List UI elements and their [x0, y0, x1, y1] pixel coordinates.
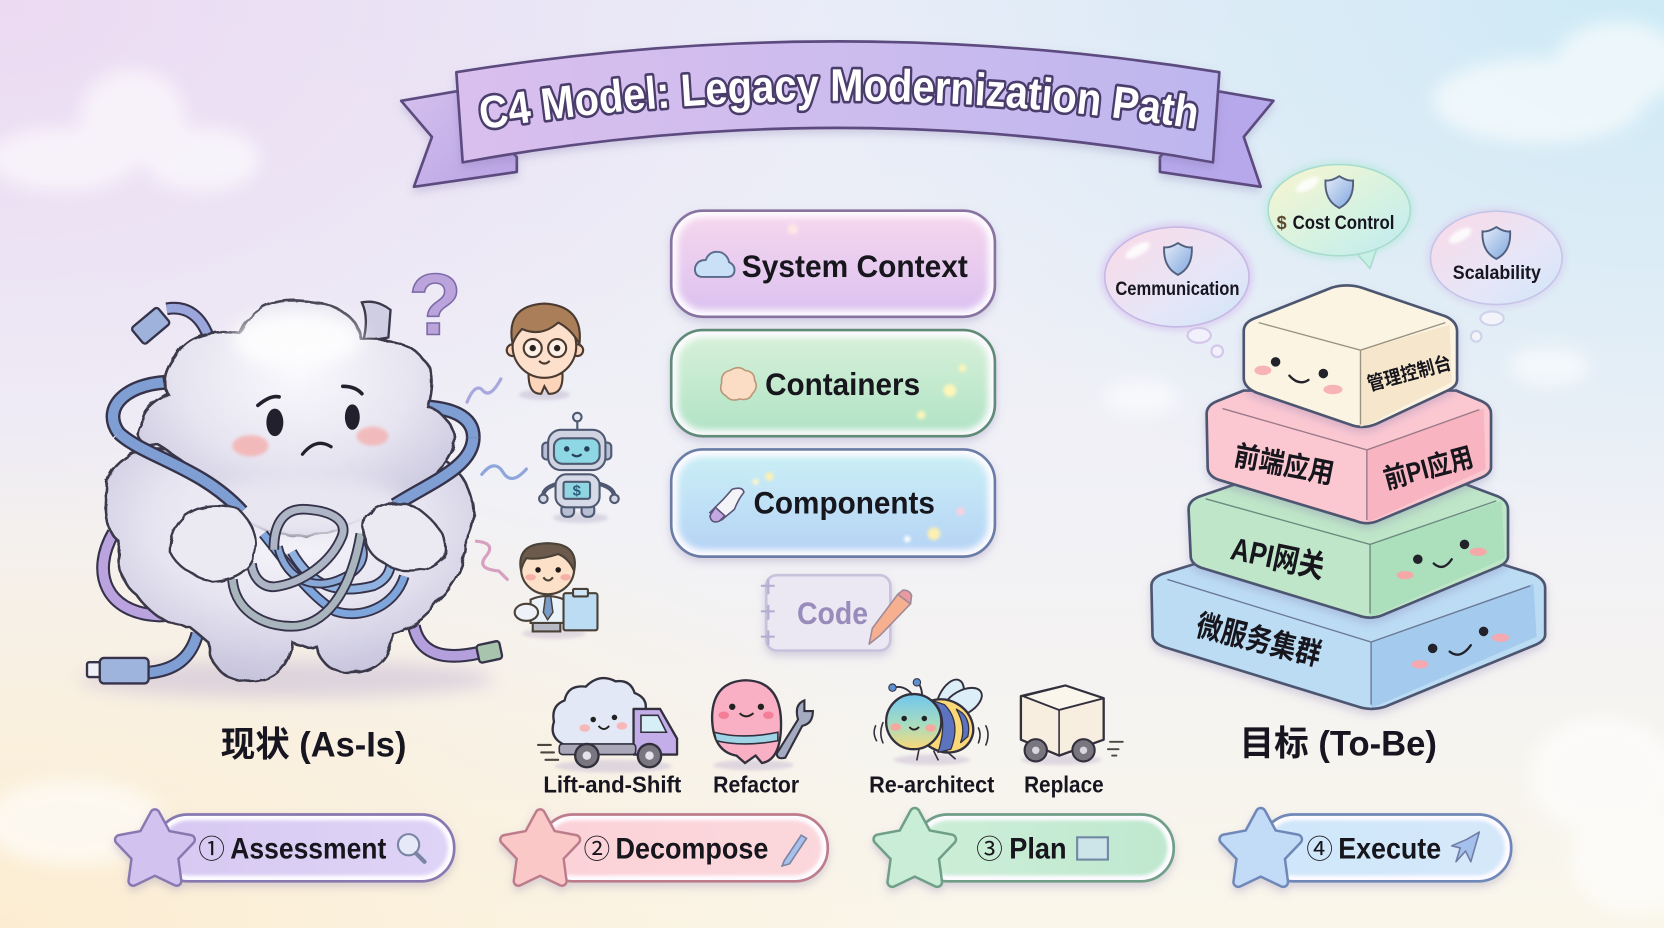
stakeholder squiggles — [467, 379, 526, 579]
ground shadow — [80, 660, 493, 698]
concern bubbles — [1100, 160, 1566, 357]
migration strategies — [538, 675, 1123, 798]
title: C4 Model: Legacy Modernization Path — [478, 66, 1199, 132]
icon: rocket — [1452, 832, 1479, 862]
label: Refactor — [713, 772, 799, 798]
strategy: refactor creature — [712, 680, 813, 798]
icon: magnifier — [398, 834, 424, 862]
step pills — [120, 813, 1511, 882]
icon: pencil — [869, 590, 912, 644]
step 4: execute: Execute — [1338, 833, 1441, 866]
bubble: communication: Cemmunication — [1115, 279, 1240, 300]
fluffy lower body — [106, 450, 473, 681]
strategy: lift-and-shift truck — [538, 678, 682, 798]
bubble: scalability: Scalability — [1453, 263, 1541, 284]
step 2: decompose: ② — [584, 835, 610, 865]
cables behind body — [103, 308, 480, 673]
bubble: cost control — [1264, 160, 1415, 268]
C4 levels — [671, 211, 995, 651]
step 2: decompose: Decompose — [616, 833, 768, 866]
tangled cables — [119, 433, 473, 626]
card: containers — [671, 330, 995, 436]
fluffy head — [139, 300, 455, 536]
stakeholders — [467, 304, 619, 639]
icon: container blob — [721, 368, 756, 400]
step 4: execute — [1224, 813, 1511, 882]
face — [1254, 357, 1342, 394]
label: Replace — [1024, 772, 1104, 798]
icon: plan box — [1077, 837, 1108, 860]
label: as-is: 现状 (As-Is) — [221, 726, 406, 765]
step 1: assessment: Assessment — [230, 833, 386, 866]
ribbon left tail — [401, 91, 517, 187]
block: microservices — [1151, 559, 1545, 709]
step 1: assessment: ① — [198, 835, 225, 865]
sad face — [232, 386, 388, 456]
legacy cloud character — [80, 256, 503, 698]
label: to-be: 目标 (To-Be) — [1240, 725, 1437, 764]
step 1: assessment — [120, 814, 454, 881]
developer with glasses — [507, 304, 583, 400]
question mark: ? — [409, 256, 462, 353]
ribbon right tail — [1160, 91, 1273, 187]
label: Re-architect — [869, 772, 995, 798]
step 2: decompose — [505, 814, 828, 881]
card: system context — [671, 211, 995, 317]
block: frontend apps: 前PI应用 — [1380, 441, 1477, 495]
card: containers: Containers — [765, 366, 920, 402]
bubble: cost control: Cost Control — [1293, 213, 1394, 234]
face — [1411, 627, 1509, 669]
card: code notebook — [761, 575, 912, 651]
target architecture stack — [1151, 285, 1545, 764]
ear tuft — [362, 302, 391, 342]
step 3: plan: Plan — [1009, 833, 1067, 866]
block: frontend apps — [1207, 391, 1491, 523]
robot — [539, 413, 619, 523]
step 4: execute: ④ — [1306, 835, 1333, 865]
card: code notebook: Code — [797, 595, 868, 631]
strategy: replace cube — [1021, 686, 1123, 798]
manager with clipboard — [515, 543, 597, 639]
strategy: re-architect bee — [869, 675, 995, 798]
bubble: scalability — [1426, 207, 1566, 342]
plugs — [87, 307, 503, 683]
block: api gateway — [1189, 484, 1508, 618]
block: frontend apps: 前端应用 — [1231, 440, 1337, 491]
face — [1397, 540, 1487, 579]
card: system context: System Context — [742, 248, 968, 284]
ribbon main band — [456, 41, 1219, 162]
bubble: cost control: $ — [1277, 213, 1287, 233]
block: admin console — [1244, 285, 1457, 427]
icon: pencil — [782, 835, 807, 866]
card: components: Components — [753, 485, 935, 521]
block: admin console: 管理控制台 — [1365, 351, 1454, 396]
block: microservices: 微服务集群 — [1193, 608, 1325, 672]
step 3: plan: ③ — [976, 835, 1003, 865]
block: api gateway: API网关 — [1228, 530, 1328, 585]
icon: cloud — [695, 252, 735, 277]
icon: component — [710, 488, 744, 522]
title ribbon — [400, 40, 1275, 208]
bubble: communication — [1100, 223, 1253, 357]
hands — [170, 506, 256, 582]
robot: $ — [573, 484, 582, 500]
card: components — [671, 449, 995, 557]
label: Lift-and-Shift — [543, 772, 682, 798]
step 3: plan — [878, 813, 1174, 882]
